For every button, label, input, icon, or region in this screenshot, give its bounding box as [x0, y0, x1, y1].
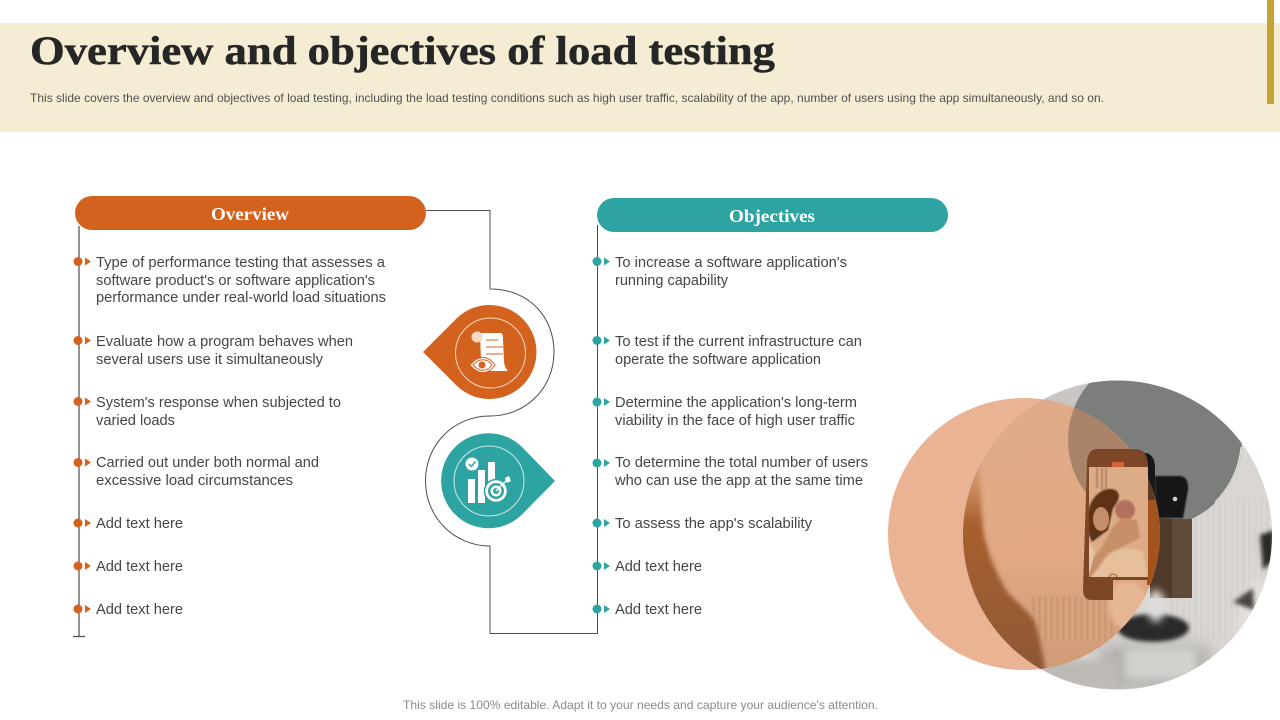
overview item 4: excessive load circumstances — [96, 473, 293, 489]
objectives heading — [597, 198, 948, 232]
phone screen — [1087, 467, 1148, 582]
panel: objectives — [592, 198, 948, 618]
overview item 5: Add text here — [96, 516, 183, 532]
objectives item 2 — [592, 334, 862, 368]
photo circle — [963, 380, 1272, 690]
dark crescent — [963, 468, 1048, 669]
photo collage: phone on a table in overlapping circles — [888, 380, 1272, 690]
objectives item 3: viability in the face of high user traffic — [615, 413, 855, 429]
phone — [1083, 449, 1148, 600]
peach circle — [888, 398, 1160, 670]
objectives item 2: operate the software application — [615, 352, 821, 368]
overview heading: Overview — [211, 204, 289, 224]
objectives item 1: running capability — [615, 273, 729, 289]
objectives item 4: To determine the total number of users — [615, 455, 868, 471]
objectives item 4 — [592, 455, 868, 489]
icon: orange pin with document and eye — [423, 305, 536, 399]
overview heading — [75, 196, 426, 230]
objectives item 1 — [592, 255, 847, 289]
dark objects seen through peach — [1148, 478, 1155, 500]
subtitle: This slide covers the overview and objectives of load testing, including the load testing conditions such as high user traffic, scalability of the app, number of users using the app simultaneously, and so on. — [30, 91, 1104, 105]
overview item 2: several users use it simultaneously — [96, 352, 324, 368]
footer note: This slide is 100% editable. Adapt it to your needs and capture your audience's attention. — [403, 698, 878, 712]
cup and dark base — [1117, 614, 1189, 642]
overview item 4: Carried out under both normal and — [96, 455, 319, 471]
right side blurred objects — [1260, 530, 1274, 570]
overview item 3: varied loads — [96, 413, 175, 429]
objectives item 3: Determine the application's long-term — [615, 395, 857, 411]
overview item 1: software product's or software application's — [96, 273, 375, 289]
objectives item 2: To test if the current infrastructure can — [615, 334, 862, 350]
table weave seen through peach — [1030, 597, 1115, 642]
overview item 4 — [74, 455, 319, 489]
gray circle seen through peach — [1068, 408, 1160, 525]
objectives item 6: Add text here — [615, 559, 702, 575]
icon: teal pin with bar chart and target — [441, 433, 555, 528]
overview item 6: Add text here — [96, 559, 183, 575]
back phones — [1144, 453, 1155, 496]
objectives item 1: To increase a software application's — [615, 255, 847, 271]
objectives item 3 — [592, 395, 857, 429]
overview item 1: performance under real-world load situations — [96, 290, 386, 306]
overlap of peach circle and photo — [963, 400, 1160, 669]
wooden stand — [1172, 519, 1192, 598]
header band — [0, 0, 1280, 132]
overview item 1 — [74, 255, 386, 306]
dark gray circle — [1074, 380, 1242, 519]
title: Overview and objectives of load testing — [30, 28, 775, 73]
panel: overview — [73, 196, 426, 636]
overview item 7: Add text here — [96, 602, 183, 618]
overview timeline — [73, 226, 85, 636]
objectives item 4: who can use the app at the same time — [614, 473, 863, 489]
overview item 1: Type of performance testing that assesses a — [96, 255, 386, 271]
objectives item 5: To assess the app's scalability — [615, 516, 813, 532]
overview item 3 — [74, 395, 341, 429]
overview item 2: Evaluate how a program behaves when — [96, 334, 353, 350]
objectives heading: Objectives — [729, 206, 815, 226]
objectives item 7: Add text here — [615, 602, 702, 618]
overview item 2 — [74, 334, 353, 368]
connector line between panels — [426, 210, 598, 634]
overview item 3: System's response when subjected to — [96, 395, 341, 411]
